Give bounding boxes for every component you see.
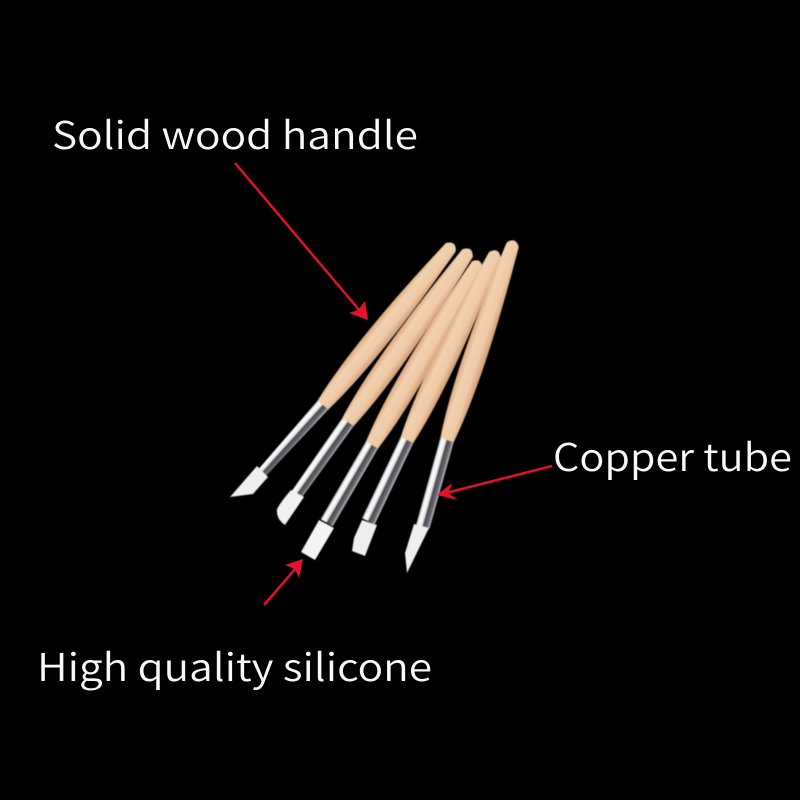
copper tube 4 [362, 435, 414, 524]
silicone tip 4 [352, 520, 377, 556]
silicone tip 2 [277, 490, 304, 525]
silicone tip 1 [230, 466, 268, 497]
label: copper tube: Copper tube [553, 427, 792, 482]
copper tube 5 [416, 436, 454, 529]
tool 2: rounded tip [277, 243, 480, 525]
wood handle 3 [362, 255, 489, 451]
silicone tip 3 [301, 520, 334, 560]
silicone tip 5 [405, 524, 429, 573]
arrow: to copper tube [437, 466, 552, 500]
tool 5: pointed tip [405, 237, 525, 573]
copper tube 3 [321, 440, 379, 526]
wood handle 1 [314, 237, 462, 412]
arrow: to wood handle [235, 163, 368, 320]
label: solid wood handle: Solid wood handle [52, 105, 418, 160]
tool 4: wedge tip [352, 246, 507, 556]
tool 3: flat tip [301, 255, 489, 560]
wood handle 4 [397, 246, 507, 445]
copper tube 2 [291, 416, 355, 499]
tools group [230, 236, 525, 573]
label: high quality silicone: High quality silicone [37, 637, 432, 692]
arrow: to silicone tip [264, 559, 303, 605]
wood handle 2 [339, 243, 480, 429]
tool 1: angled chisel tip [230, 236, 462, 497]
copper tube 1 [258, 399, 330, 477]
wood handle 5 [436, 237, 525, 444]
